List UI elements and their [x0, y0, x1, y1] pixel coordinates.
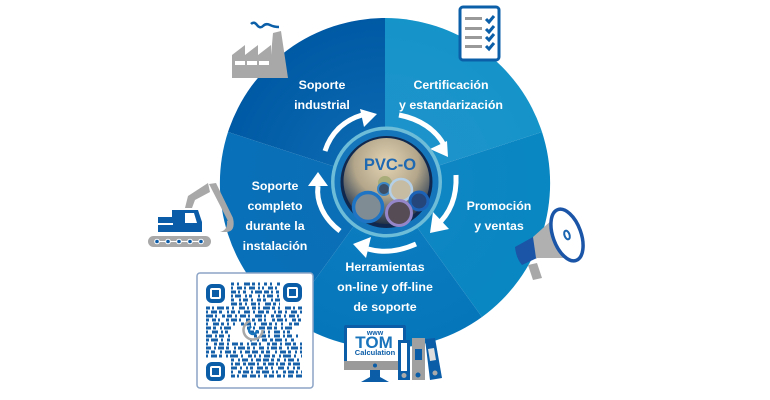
panel: segmented circle [220, 18, 550, 348]
sector: promoción [385, 132, 550, 317]
sector: soporte completo [220, 132, 385, 317]
heading: Soporte industrial: Soporte [299, 78, 346, 92]
binder 2 [412, 338, 425, 380]
binder 1 [398, 340, 410, 380]
icon: megaphone [515, 205, 589, 280]
PVC-O pipe photo [331, 126, 442, 238]
QR centre logo [244, 320, 262, 340]
heading: Soporte completo: durante la [245, 219, 305, 233]
QR code [197, 273, 313, 388]
label: www: www [366, 330, 384, 337]
icon: TOM Calculation monitor and binders [344, 325, 442, 382]
icon: excavator [148, 183, 234, 247]
heading: Soporte industrial: industrial [294, 98, 350, 112]
arrow: top left [325, 109, 377, 151]
heading: Soporte completo: Soporte [252, 179, 299, 193]
label: TOM: TOM [355, 333, 393, 352]
label: Calculation: Calculation [355, 348, 396, 357]
binder 3 [425, 338, 442, 380]
small pipes [354, 176, 428, 226]
arrow: top right [399, 115, 448, 157]
heading: Certificación: Certificación [413, 78, 489, 92]
QR modules [206, 284, 302, 376]
QR finder patterns [208, 285, 300, 379]
arrow: right [430, 175, 456, 233]
heading: Herramientas: Herramientas [345, 260, 425, 274]
heading: Certificación: y estandarización [399, 98, 503, 112]
arrow: left [308, 172, 340, 231]
heading: Soporte completo: instalación [243, 239, 307, 253]
heading: Promoción: y ventas [474, 219, 524, 233]
sector: herramientas [288, 183, 482, 348]
label: PVC-O: PVC-O [364, 156, 416, 174]
sector: soporte industrial [228, 18, 385, 183]
icon: factory [232, 23, 288, 78]
heading: Promoción: Promoción [467, 199, 531, 213]
heading: Herramientas: de soporte [353, 300, 417, 314]
cycle arrows [308, 109, 456, 258]
sector: certificación [385, 18, 542, 183]
arrow: bottom [353, 237, 416, 258]
icon: checklist [460, 7, 499, 60]
heading: Soporte completo: completo [247, 199, 303, 213]
heading: Herramientas: on-line y off-line [337, 280, 433, 294]
